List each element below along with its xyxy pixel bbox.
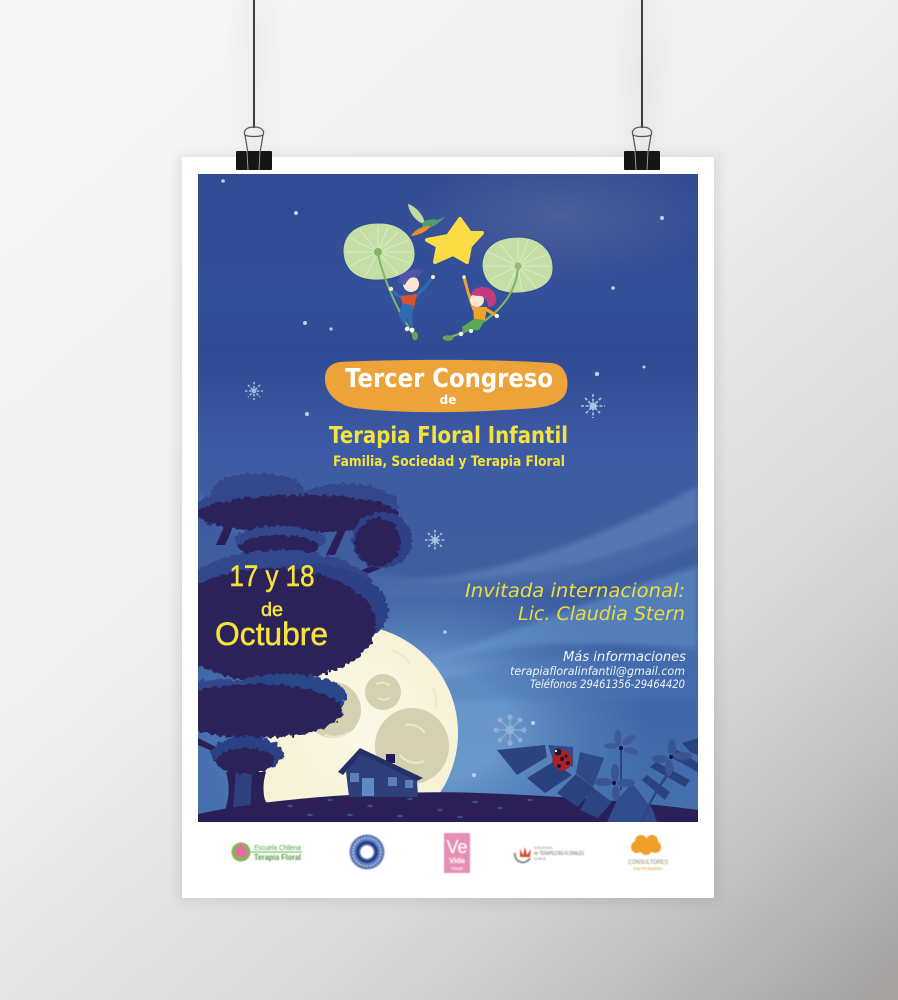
contact information: Teléfonos 29461356-29464420	[530, 677, 685, 691]
date: Octubre	[215, 616, 328, 652]
moon	[258, 630, 458, 802]
snowflake	[494, 715, 526, 745]
date: 17 y 18	[230, 560, 314, 593]
poster artwork panel	[198, 174, 698, 822]
logo: blue mandala	[350, 834, 384, 870]
snowflake	[581, 394, 605, 418]
hummingbird	[408, 204, 445, 236]
snowflake	[425, 530, 445, 550]
boy	[389, 270, 435, 332]
tree trunk and branches	[198, 527, 381, 809]
logo: Colegio de Terapeutas Florales	[515, 845, 584, 862]
title connector: de	[440, 393, 456, 407]
guest speaker	[466, 582, 684, 620]
logo: Colegio de Terapeutas Florales: COLEGIO	[534, 845, 552, 850]
girl	[459, 275, 499, 336]
left binder clip	[236, 127, 272, 170]
flower	[652, 739, 692, 776]
stars	[221, 179, 664, 777]
plant with flowers and ladybug	[497, 730, 698, 822]
date	[216, 565, 327, 646]
logo: Ve Vida	[444, 833, 470, 873]
flower	[594, 764, 635, 801]
right binder clip	[624, 127, 660, 170]
logo: Consultores	[628, 835, 668, 871]
logo: Colegio de Terapeutas Florales: CHILE	[534, 856, 546, 861]
left dandelion	[343, 223, 418, 340]
tree	[198, 472, 413, 809]
subtitle: Terapia Floral Infantil: Terapia Floral Infantil	[329, 423, 568, 449]
moon glow and sky swooshes	[202, 487, 698, 802]
guest speaker: Invitada internacional:	[465, 581, 685, 602]
contact information	[510, 650, 686, 691]
logo: Consultores: CONSULTORES	[628, 860, 668, 866]
right dandelion	[442, 237, 553, 341]
right hanging string	[641, 0, 643, 128]
contact information: Más informaciones	[563, 650, 686, 665]
logo: Escuela Chilena Terapia Floral	[232, 842, 302, 862]
logo: Ve Vida: Ve	[446, 837, 468, 857]
logo: Colegio de Terapeutas Florales: de TERAPEUTAS FLORALES	[534, 851, 584, 857]
flower	[604, 730, 639, 756]
poster sheet	[178, 155, 718, 902]
star	[427, 219, 482, 262]
logo: Ve Vida: Vida	[449, 856, 466, 865]
logo: Consultores: Grupo Psicoterapéutico	[633, 866, 663, 871]
snowflake	[245, 382, 263, 400]
tree foliage	[198, 472, 413, 776]
title badge	[325, 360, 567, 412]
guest speaker: Lic. Claudia Stern	[518, 604, 685, 625]
left hanging string	[253, 0, 255, 128]
contact information: terapiafloralinfantil@gmail.com	[510, 664, 685, 678]
tagline: Familia, Sociedad y Terapia Floral	[333, 454, 565, 470]
fern leaves	[497, 738, 698, 822]
sponsor logos	[232, 833, 668, 873]
house	[338, 748, 423, 797]
illustration: dandelions, star, hummingbird, children	[343, 204, 553, 341]
title text: Tercer Congreso	[345, 364, 553, 394]
logo: Ve Vida: Floral	[451, 866, 463, 871]
logo: Escuela Chilena Terapia Floral: Terapia Floral	[254, 853, 301, 862]
date: de	[261, 600, 283, 621]
ladybug	[552, 748, 572, 770]
hill	[198, 792, 698, 822]
string shadows on wall	[225, 0, 674, 158]
logo: Escuela Chilena Terapia Floral: Escuela Chilena	[254, 843, 302, 852]
